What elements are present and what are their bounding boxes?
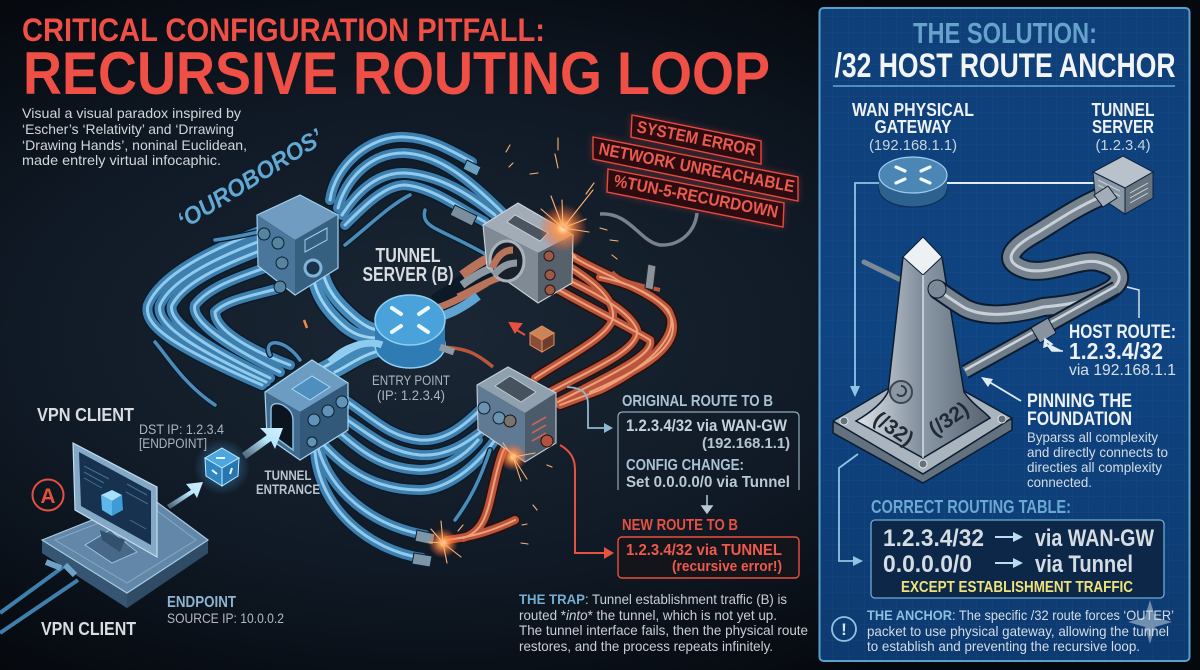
connectors and sparks	[304, 138, 618, 567]
box: tunnel entrance	[265, 360, 348, 460]
arrow: original route	[567, 387, 606, 428]
callout: host route: HOST ROUTE:	[1069, 322, 1176, 343]
cables	[0, 567, 78, 633]
callout: host route: via 192.168.1.1	[1069, 362, 1176, 379]
broken wire	[600, 213, 697, 290]
label: vpn client bottom: VPN CLIENT	[41, 619, 136, 639]
title	[22, 12, 770, 107]
the trap text: routed *into* the tunnel, which is not yet up.	[519, 607, 777, 623]
anchor: /32 obelisk: (/32)	[869, 407, 918, 451]
blue cable bundles	[147, 137, 505, 558]
label: tunnel server B: TUNNEL	[376, 245, 440, 267]
label: tunnel server	[1092, 100, 1154, 154]
label: entry point	[372, 372, 450, 403]
the trap text	[519, 591, 808, 654]
connector lines	[850, 183, 1094, 397]
label: entry point: ENTRY POINT	[372, 372, 450, 388]
callout: pinning the foundation: Byparss all complexity	[1027, 429, 1158, 445]
the anchor text: packet to use physical gateway, allowing the tunnel	[867, 623, 1169, 639]
box: original route	[618, 412, 799, 491]
routing table: EXCEPT ESTABLISHMENT TRAFFIC	[901, 579, 1133, 596]
label: destination ip	[139, 422, 224, 451]
heading: original route: ORIGINAL ROUTE TO B	[622, 393, 773, 410]
box: bottom right junction	[477, 367, 556, 462]
panel heading: THE SOLUTION:	[913, 18, 1097, 50]
label: endpoint	[167, 594, 284, 626]
box: original route: Set 0.0.0.0/0 via Tunnel	[626, 474, 790, 491]
callout: pinning the foundation: connected.	[1027, 474, 1092, 490]
heading: new route: NEW ROUTE TO B	[622, 517, 738, 534]
label: tunnel entrance	[256, 467, 320, 497]
router: tunnel server B	[330, 295, 454, 368]
pipe: looping cable	[928, 197, 1119, 314]
icon: glowing packet	[194, 439, 250, 495]
box: new route: 1.2.3.4/32 via TUNNEL	[626, 542, 782, 559]
monitor	[73, 443, 157, 557]
error glow	[593, 115, 798, 227]
small red packet	[510, 323, 554, 352]
error badge: tun recurdown: %TUN-5-RECURDOWN	[612, 171, 780, 222]
error badge: system error: SYSTEM ERROR	[635, 117, 758, 160]
connector: anchor to routing table	[839, 454, 863, 566]
label: wan gateway: GATEWAY	[874, 117, 952, 137]
callout: pinning the foundation: and directly connects to	[1027, 444, 1168, 460]
label: destination ip: [ENDPOINT]	[139, 436, 207, 451]
box: new route	[618, 537, 799, 578]
client: vpn client computer	[0, 443, 208, 633]
route callout	[560, 387, 799, 578]
arrow: new route	[560, 445, 606, 553]
icon: cube on screen	[101, 490, 123, 516]
callout: pinning the foundation: PINNING THE	[1027, 391, 1132, 412]
the trap text: The tunnel interface fails, then the physical route	[519, 622, 808, 638]
label: wan gateway: (192.168.1.1)	[869, 137, 957, 154]
title: CRITICAL CONFIGURATION PITFALL:	[22, 12, 545, 48]
icon: exclamation	[832, 617, 856, 641]
icon: wan router	[879, 157, 947, 207]
badge: A: A	[40, 485, 56, 508]
label: tunnel server B	[362, 245, 454, 286]
the anchor text: THE ANCHOR: The specific /32 route forces ‘OUTER’	[867, 607, 1174, 623]
intro text block: made entrely virtual infocaphic.	[22, 152, 221, 168]
label: entry point: (IP: 1.2.3.4)	[377, 387, 445, 403]
callout: pinning the foundation: FOUNDATION	[1027, 409, 1132, 430]
label: tunnel server: (1.2.3.4)	[1096, 137, 1150, 154]
the trap text: THE TRAP: Tunnel establishment traffic (B) is	[519, 591, 787, 607]
label: vpn client top: VPN CLIENT	[37, 405, 134, 425]
label: destination ip: DST IP: 1.2.3.4	[139, 422, 224, 437]
label: endpoint: ENDPOINT	[167, 594, 236, 611]
label: endpoint: SOURCE IP: 10.0.0.2	[167, 610, 284, 626]
box: original route: (192.168.1.1)	[702, 435, 790, 452]
label: ouroboros: ‘OUROBOROS’	[173, 124, 328, 235]
intro text block: ‘Drawing Hands’, noninal Euclidean,	[22, 137, 247, 153]
sparkle mark	[1128, 600, 1172, 644]
routing table: 0.0.0.0/0	[883, 551, 972, 578]
base unit	[42, 497, 208, 608]
twisted rope to router	[437, 253, 515, 318]
diagram: tangled tunnel loop	[147, 137, 673, 567]
intro text block	[22, 105, 247, 168]
box: original route: 1.2.3.4/32 via WAN-GW	[626, 417, 787, 435]
label: tunnel server: SERVER	[1092, 117, 1154, 137]
label: wan gateway: WAN PHYSICAL	[852, 100, 974, 120]
icon: server cube	[1093, 156, 1153, 214]
arrow: packet to tunnel entrance	[242, 428, 283, 459]
arrow: client to packet	[167, 482, 203, 509]
box: original route: CONFIG CHANGE:	[626, 457, 744, 474]
red failing cable bundles	[440, 250, 673, 540]
anchor: /32 obelisk	[833, 237, 1012, 483]
anchor: /32 obelisk: (/32)	[925, 397, 973, 441]
callout: host route	[1044, 287, 1176, 379]
rear pipe stub	[864, 262, 905, 282]
stand	[85, 530, 137, 563]
panel heading	[834, 18, 1176, 85]
icon: exclamation: !	[841, 620, 847, 639]
callout: host route: 1.2.3.4/32	[1069, 338, 1163, 364]
the trap text: restores, and the process repeats infinitely.	[519, 638, 773, 654]
panel: the solution	[820, 8, 1190, 661]
label: tunnel entrance: ENTRANCE	[256, 481, 320, 497]
the anchor text	[867, 607, 1174, 654]
box: new route: (recursive error!)	[672, 558, 782, 575]
label: wan gateway	[852, 100, 974, 154]
routing table: 1.2.3.4/32	[883, 525, 984, 552]
error messages	[593, 115, 798, 227]
arrow: config change	[702, 495, 712, 513]
routing table: via WAN-GW	[1035, 525, 1154, 552]
label: tunnel entrance: TUNNEL	[264, 467, 312, 483]
title: RECURSIVE ROUTING LOOP	[23, 40, 770, 107]
label: tunnel server: TUNNEL	[1092, 100, 1154, 120]
routing table: via Tunnel	[1035, 551, 1133, 578]
callout: pinning the foundation	[981, 377, 1168, 490]
intro text block: ‘Escher’s ‘Relativity’ and ‘Drrawing	[22, 121, 234, 137]
badge: A	[32, 480, 64, 510]
the anchor text: to establish and preventing the recursive loop.	[867, 638, 1140, 654]
error badge: network unreachable: NETWORK UNREACHABLE	[597, 139, 796, 196]
heading: routing table: CORRECT ROUTING TABLE:	[871, 497, 1071, 517]
intro text block: Visual a visual paradox inspired by	[22, 105, 241, 121]
box: top right grey junction	[483, 203, 573, 303]
label: tunnel server B: SERVER (B)	[362, 264, 454, 286]
box: top left junction	[257, 195, 338, 295]
routing table	[871, 520, 1164, 598]
pipe: straight host route	[965, 286, 1116, 372]
callout: pinning the foundation: directies all complexity	[1027, 459, 1162, 475]
